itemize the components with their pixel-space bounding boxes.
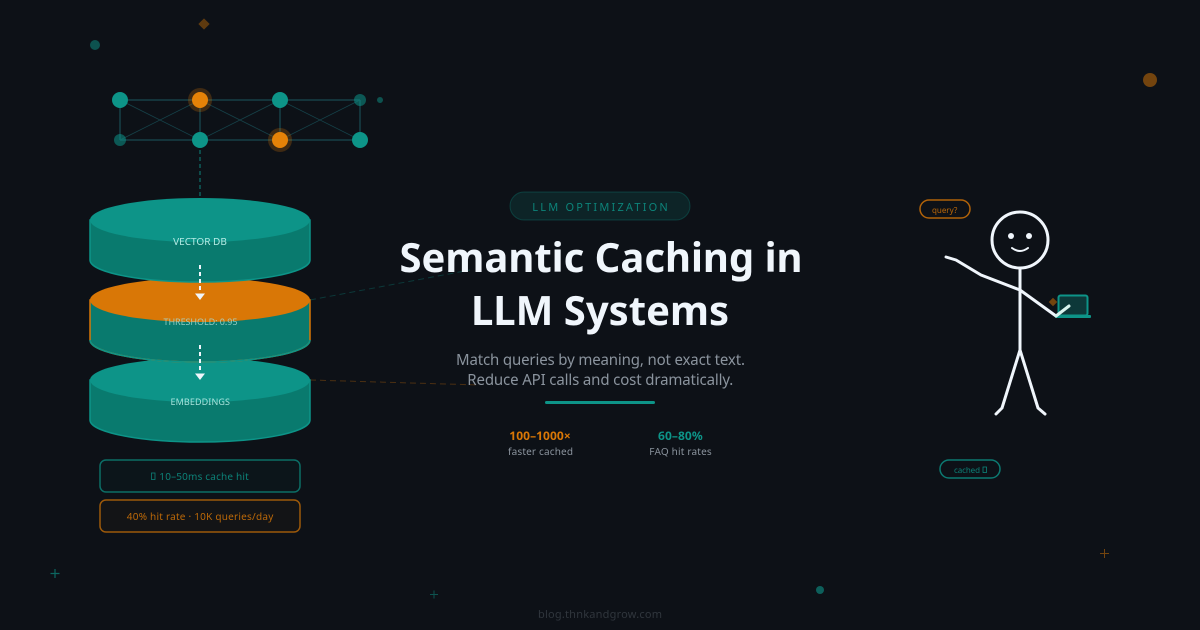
stat: speed [508,427,573,458]
title: LLM Systems [471,282,729,337]
badge: LLM optimization: LLM OPTIMIZATION [532,200,668,215]
speech bubble: query [920,200,970,218]
dashed connector: threshold to title [310,270,470,300]
speech bubble: query: query? [932,205,958,216]
stick figure [946,212,1069,414]
callout: hit rate: 40% hit rate · 10K queries/day [127,509,274,523]
vector network graph [112,88,383,152]
title [399,229,803,337]
label: threshold: THRESHOLD: 0.95 [164,315,238,328]
icon: laptop [1055,296,1091,318]
label: embeddings: EMBEDDINGS [170,395,230,408]
dashed link: network to database [199,150,201,198]
subtitle: Reduce API calls and cost dramatically. [467,370,733,390]
stat: speed: faster cached [508,444,573,458]
speech bubble: cached [940,460,1000,478]
small diamond near laptop [1049,298,1057,306]
stat: hit rates: 60–80% [658,427,703,444]
subtitle: Match queries by meaning, not exact text. [456,350,745,370]
callout: latency [100,460,300,492]
speech bubble: cached: cached [954,465,980,476]
badge: LLM optimization [510,192,690,220]
accent divider [545,401,655,404]
callout: hit rate [100,500,300,532]
label: vector db: VECTOR DB [173,234,227,248]
arrow: threshold to embeddings [195,345,205,380]
database layer: vector db [90,198,310,282]
subtitle [456,350,745,390]
stat: hit rates [649,427,712,458]
footer: site url: blog.thnkandgrow.com [538,607,662,622]
arrow: vector db to threshold [195,265,205,300]
database layer: embeddings [90,358,310,442]
database layer: threshold [90,278,310,362]
stat: speed: 100–1000× [509,427,571,444]
title: Semantic Caching in [399,229,803,284]
callout: latency: 10–50ms cache hit [159,469,249,483]
stat: hit rates: FAQ hit rates [649,444,712,458]
dashed connector: embeddings to subtitle [310,380,480,385]
